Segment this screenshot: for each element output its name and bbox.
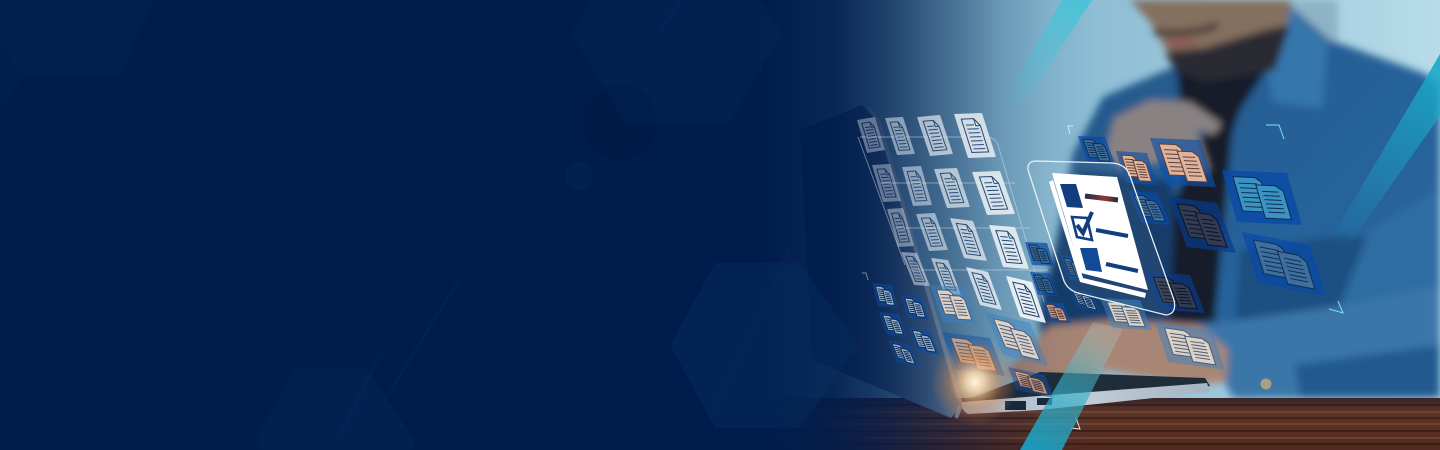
checklist page: [1052, 173, 1148, 290]
background photo: man at laptop: [760, 0, 1440, 450]
document row 3: [887, 208, 1029, 269]
bracket right: [1329, 301, 1343, 313]
shirt cuff: [1205, 285, 1440, 398]
bracket bottom: [1071, 418, 1080, 429]
shirt collar highlight: [1268, 8, 1328, 108]
laptop lid back: [828, 105, 960, 418]
table top: [760, 398, 1440, 450]
bracket top right: [1266, 125, 1284, 139]
document icon grid: [857, 113, 1046, 323]
shirt shadow at torso: [1040, 170, 1215, 340]
black t-shirt: [1170, 62, 1268, 322]
item block 3: [1080, 248, 1102, 272]
folder tiles right cluster: [1078, 136, 1326, 370]
item line 2: [1096, 230, 1128, 236]
typing hands: [1005, 320, 1228, 402]
rounded glass frame: [1028, 161, 1175, 315]
denim shirt: [1040, 3, 1440, 398]
circle: [583, 85, 657, 159]
item block 1: [1060, 184, 1083, 208]
laptop: [800, 105, 1210, 418]
sleeve button: [1260, 378, 1272, 390]
item line 1: [1085, 196, 1118, 200]
laptop port: [1037, 398, 1052, 405]
connector lines and frame behind documents: [858, 137, 1048, 305]
shape top left: [0, 0, 155, 75]
checkbox: [1072, 217, 1092, 240]
decorative hexagons and shapes: [0, 0, 858, 450]
folder tiles left cluster: [872, 242, 1101, 398]
checklist panel: [1028, 161, 1175, 315]
wall pillar: [1292, 0, 1340, 47]
faint diagonal lines: [340, 2, 790, 435]
laptop base: [962, 383, 1210, 414]
raised hand: [1105, 100, 1222, 172]
table wood grain: [892, 404, 1440, 445]
torso shadow near elbow: [1234, 234, 1366, 320]
laptop glow: [925, 335, 1025, 430]
document row 2: [872, 164, 1015, 215]
item line 3: [1106, 264, 1138, 271]
back page strip: [1049, 180, 1146, 298]
hero banner: [710, 0, 1440, 450]
lips: [1162, 38, 1198, 48]
hexagon bottom left: [255, 368, 415, 450]
document row 1: [857, 113, 996, 158]
teal ribbon bottom: [1020, 322, 1123, 450]
document row 4: [901, 252, 1046, 323]
right sleeve: [1340, 199, 1436, 305]
beard: [1165, 25, 1290, 82]
hexagon lower centre: [670, 263, 858, 428]
teal ribbon right: [1330, 54, 1440, 250]
bracket left: [862, 273, 868, 280]
hexagon top centre: [572, 0, 782, 125]
corner brackets: [862, 125, 1343, 429]
blurred person: [1005, 0, 1440, 402]
sleeve lower shadow: [1295, 345, 1440, 398]
shape left edge: [0, 42, 30, 108]
face: [1128, 0, 1296, 56]
moustache: [1154, 25, 1218, 33]
laptop keyboard deck: [962, 372, 1210, 402]
laptop port: [1005, 401, 1026, 410]
laptop lid edge: [868, 108, 961, 418]
small circle: [565, 162, 593, 190]
bracket top left: [1068, 126, 1073, 134]
teal ribbon top: [1002, 0, 1092, 108]
office wall: [816, 0, 1440, 398]
check mark: [1077, 212, 1092, 233]
